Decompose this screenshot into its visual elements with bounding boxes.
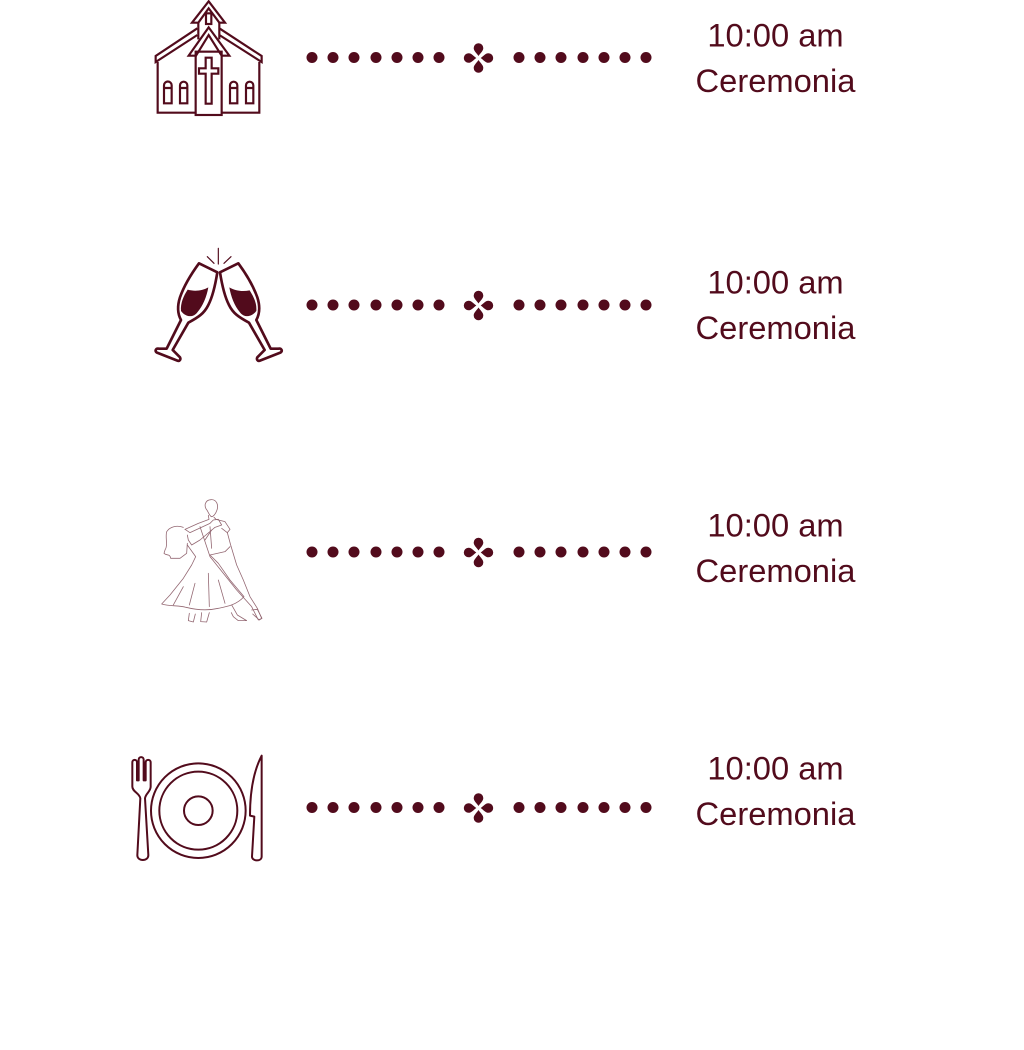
- text: toast time: 10:00 am: [707, 263, 844, 300]
- text: dance time: 10:00 am: [707, 506, 844, 543]
- text: dinner time: Ceremonia: [696, 795, 856, 832]
- text: dinner time: 10:00 am: [707, 749, 844, 786]
- text: ceremony time: Ceremonia: [696, 62, 856, 99]
- timeline: ceremony dots: [306, 43, 652, 73]
- icon: dancing couple: [162, 500, 262, 622]
- icon: toasting glasses: [156, 248, 282, 361]
- timeline: dance dots: [306, 538, 652, 567]
- text: toast time: Ceremonia: [696, 309, 856, 346]
- icon: plate with fork and knife: [132, 756, 262, 860]
- icon: church: [156, 1, 262, 115]
- text: dance time: Ceremonia: [696, 552, 856, 589]
- timeline: dinner dots: [306, 793, 652, 823]
- timeline: toast dots: [306, 291, 652, 320]
- text: ceremony time: 10:00 am: [707, 16, 844, 53]
